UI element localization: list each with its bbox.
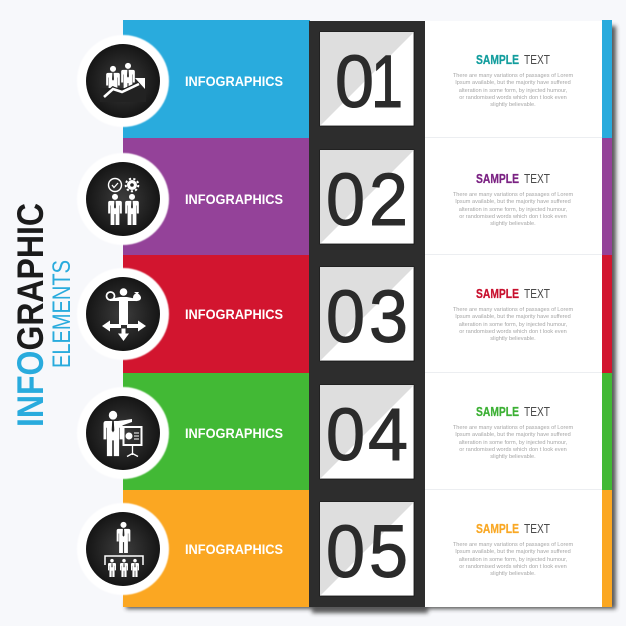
text block 2: or randomised words which don t look even [459,214,567,220]
band: blue [123,20,310,138]
text block 2: There are many variations of passages of Lorem [453,192,574,198]
colour strips [602,20,612,607]
text block 4: alteration in some form, by injected humour, [459,440,568,446]
text block 2: slightly believable. [490,221,536,227]
number tile 02: 2 [369,158,408,241]
icon badge 3: decision arrows [77,268,169,360]
text block 5 [453,522,574,577]
drop shadow [126,26,616,613]
dark number column [309,21,425,607]
number tile 01 [320,32,414,126]
icon badge 5: hierarchy [77,503,169,595]
text block 4: Ipsum available, but the majority have suffered [455,432,571,438]
text block 5: Ipsum available, but the majority have suffered [455,549,571,555]
number tile 02: 0 [326,158,365,241]
band: orange [123,490,310,607]
text block 5: SAMPLE [476,522,519,536]
text block 2: SAMPLE [476,172,519,186]
text block 1: TEXT [524,53,550,67]
text block 4: TEXT [524,405,550,419]
number tile 03 [320,267,414,361]
text block 5: alteration in some form, by injected humour, [459,557,568,563]
band: green [123,373,310,490]
text block 2: TEXT [524,172,550,186]
text block 4 [453,405,574,460]
text block 4: SAMPLE [476,405,519,419]
text block 1: or randomised words which don t look even [459,95,567,101]
text block 3: TEXT [524,287,550,301]
text block 2: alteration in some form, by injected humour, [459,207,568,213]
label: infographics 5: INFOGRAPHICS [185,541,283,557]
text block 3: alteration in some form, by injected humour, [459,322,568,328]
rotated title [10,203,76,427]
text block 2 [453,172,574,227]
number tile 04: 4 [368,393,408,476]
text block 3: Ipsum available, but the majority have suffered [455,314,571,320]
text block 3: slightly believable. [490,336,536,342]
icon badge 2: clock and gear [77,153,169,245]
text block 5: TEXT [524,522,550,536]
text block 1: slightly believable. [490,102,536,108]
text block 4: There are many variations of passages of Lorem [453,425,574,431]
text block 2: Ipsum available, but the majority have suffered [455,199,571,205]
band: purple [123,138,310,255]
number tile 01: 0 [335,40,374,123]
icon badge 4: presenter [77,387,169,479]
band: red [123,255,310,373]
text block 5: There are many variations of passages of Lorem [453,542,574,548]
label: infographics 3: INFOGRAPHICS [185,306,283,322]
text block 1: Ipsum available, but the majority have suffered [455,80,571,86]
number tile 04: 0 [326,393,365,476]
number tile 05 [320,502,414,596]
text block 3: There are many variations of passages of Lorem [453,307,574,313]
number tile 01: 1 [371,40,403,123]
text block 5: or randomised words which don t look even [459,564,567,570]
number tile 02 [320,150,414,244]
text block 5: slightly believable. [490,571,536,577]
number tile 05: 5 [369,510,408,593]
white text panels [425,21,603,607]
label: infographics 4: INFOGRAPHICS [185,425,283,441]
rotated title: INFOGRAPHIC [10,203,51,427]
text block 4: slightly believable. [490,454,536,460]
number tile 05: 0 [326,510,365,593]
text block 1: alteration in some form, by injected humour, [459,88,568,94]
text block 4: or randomised words which don t look even [459,447,567,453]
label: infographics 1: INFOGRAPHICS [185,73,283,89]
text block 3: SAMPLE [476,287,519,301]
number tile 03: 0 [326,275,365,358]
label: infographics 2: INFOGRAPHICS [185,191,283,207]
icon badge 1: team growth [77,35,169,127]
number tile 04 [320,385,414,479]
text block 1: There are many variations of passages of Lorem [453,73,574,79]
number tile 03: 3 [369,275,408,358]
text block 3: or randomised words which don t look even [459,329,567,335]
text block 1: SAMPLE [476,53,519,67]
text block 3 [453,287,574,342]
text block 1 [453,53,574,108]
subtitle: ELEMENTS [48,260,76,368]
